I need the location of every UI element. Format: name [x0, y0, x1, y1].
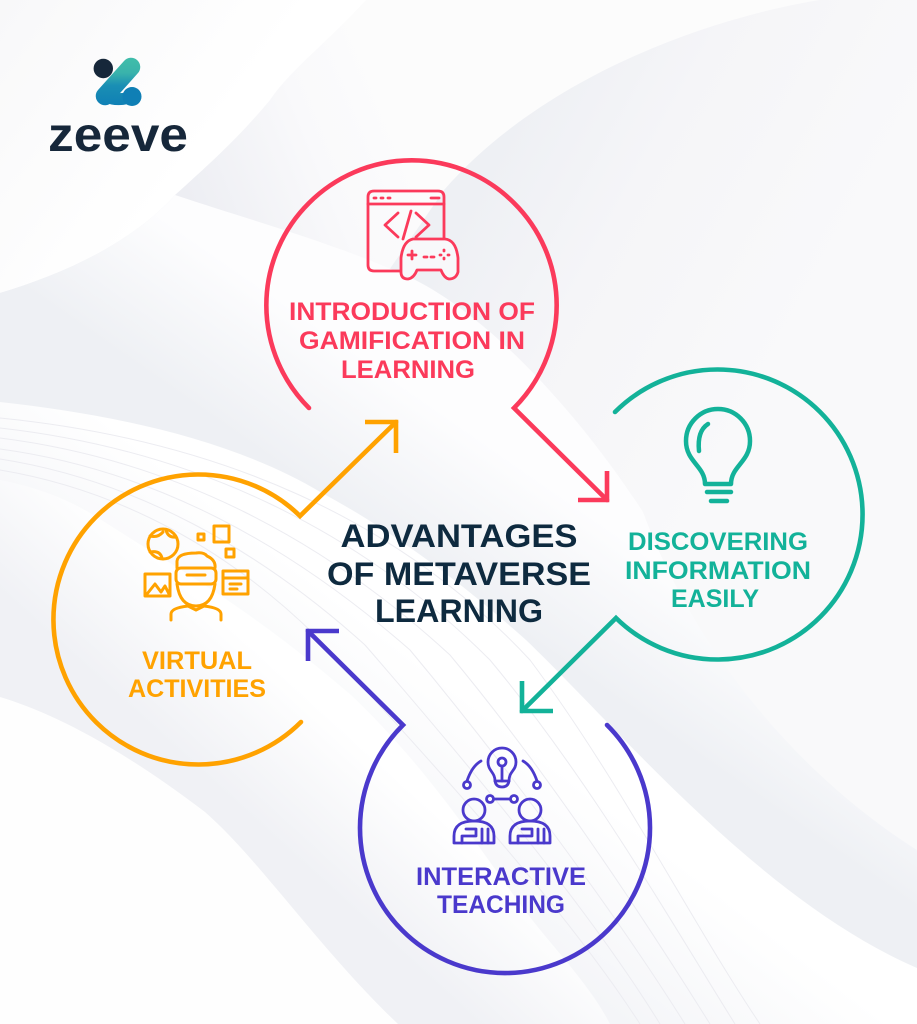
panel: interactive teaching [308, 631, 650, 973]
icon: zeeve mark [94, 59, 142, 106]
label: EASILY [671, 585, 759, 613]
icon: browser and gamepad [368, 191, 458, 279]
ring and arrow [53, 422, 396, 764]
label: INTERACTIVE [416, 863, 586, 891]
ring and arrow [522, 370, 863, 711]
label: INFORMATION [625, 557, 811, 585]
label: TEACHING [437, 891, 565, 919]
icon: two people and idea [454, 748, 550, 843]
label: VIRTUAL [142, 647, 252, 675]
label: LEARNING [341, 356, 475, 384]
ring and arrow [308, 631, 650, 973]
title [327, 518, 591, 629]
label: ACTIVITIES [128, 675, 266, 703]
title: ADVANTAGES [340, 518, 578, 554]
label [289, 298, 535, 384]
label: DISCOVERING [628, 528, 808, 556]
panel: gamification [266, 160, 607, 500]
logo: zeeve [48, 59, 188, 162]
icon: light bulb [686, 409, 750, 501]
panel: discovering information [522, 370, 863, 711]
label [416, 863, 586, 919]
icon: VR user [145, 526, 248, 620]
label [128, 647, 266, 703]
panel: virtual activities [53, 422, 396, 764]
logo wordmark: zeeve [48, 109, 188, 162]
ring and arrow [266, 160, 607, 500]
label: GAMIFICATION IN [299, 327, 525, 355]
title: OF METAVERSE [327, 556, 591, 592]
label: INTRODUCTION OF [289, 298, 535, 326]
label [625, 528, 811, 613]
title: LEARNING [375, 593, 543, 629]
